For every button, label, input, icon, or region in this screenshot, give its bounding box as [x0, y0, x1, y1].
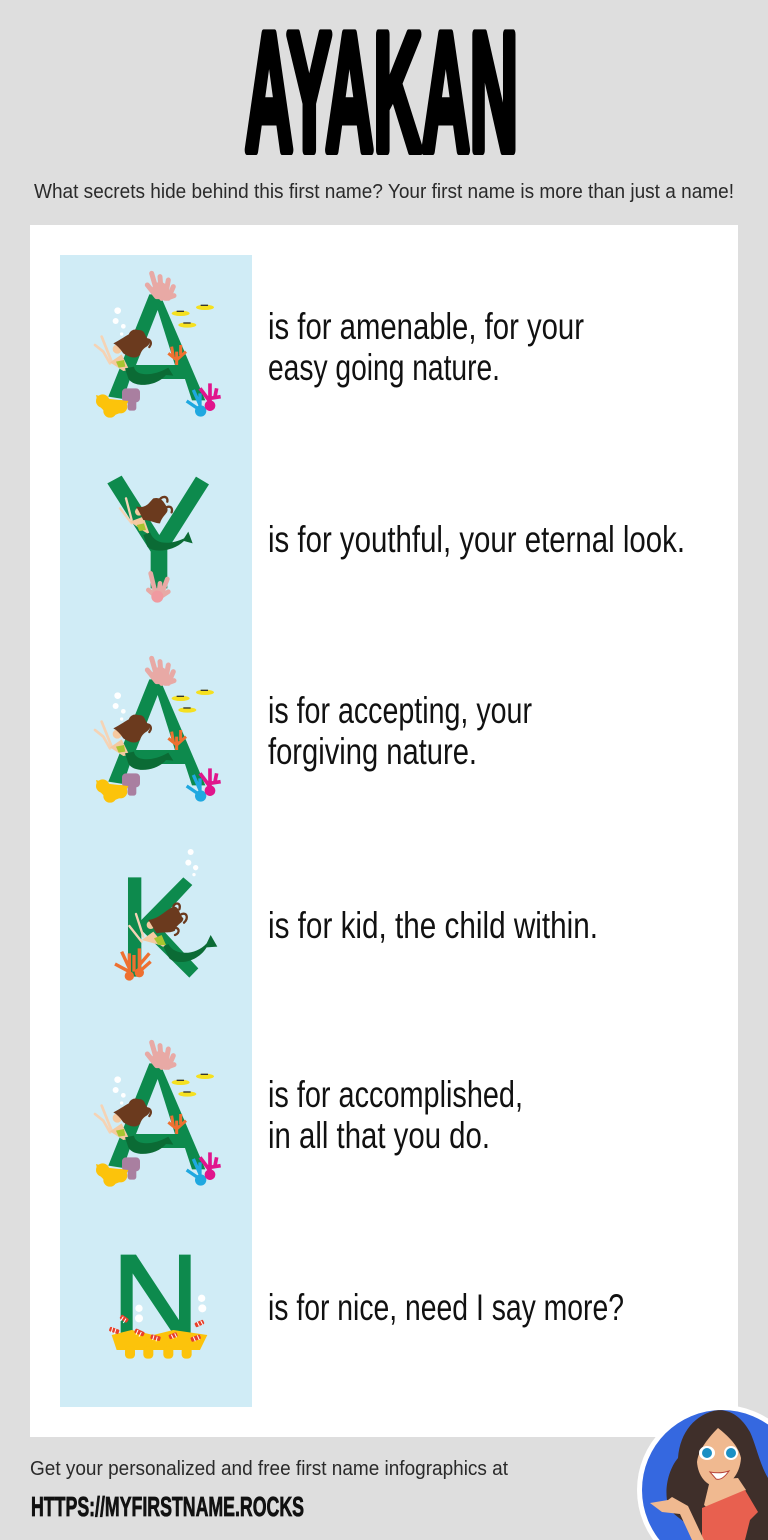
icon: avatar: [637, 1405, 768, 1540]
text: letter A meaning 1: easy going nature.: [268, 347, 500, 388]
text: letter A meaning 3: is for accomplished,: [268, 1074, 523, 1115]
icon: letter Y mermaid: [107, 476, 209, 603]
text: letter A meaning 2: forgiving nature.: [268, 731, 477, 772]
text: letter A meaning 1: is for amenable, for your: [268, 306, 584, 347]
footer url: HTTPS://MYFIRSTNAME.ROCKS: [31, 1491, 304, 1522]
footer text: Get your personalized and free first name infographics at: [30, 1458, 508, 1480]
subtitle: What secrets hide behind this first name? Your first name is more than just a name!: [34, 181, 734, 203]
text: letter A meaning 3: in all that you do.: [268, 1115, 490, 1156]
avatar neck: [704, 1478, 746, 1506]
text: letter A meaning 1: [268, 306, 584, 388]
icon: letter K mermaid: [115, 849, 217, 981]
avatar smile: [710, 1471, 729, 1479]
icon: letter N with clownfish: [109, 1255, 207, 1359]
text: letter N meaning: is for nice, need I say more?: [268, 1287, 624, 1328]
panel: light blue letter column: [60, 255, 252, 1407]
text: letter A meaning 2: [268, 690, 532, 772]
icon: letter A mermaid 1: [95, 273, 221, 418]
icon: letter A mermaid 2: [95, 658, 221, 803]
text: letter K meaning: is for kid, the child within.: [268, 905, 598, 946]
text: letter A meaning 2: is for accepting, your: [268, 690, 532, 731]
avatar eyes: [699, 1446, 738, 1460]
avatar face: [697, 1428, 741, 1487]
panel: white card: [30, 225, 738, 1437]
avatar arm and hand: [650, 1497, 704, 1540]
text: letter A meaning 3: [268, 1074, 523, 1156]
icon: letter A mermaid 3: [95, 1042, 221, 1187]
avatar shirt: [702, 1490, 758, 1540]
avatar hair: [666, 1410, 768, 1540]
